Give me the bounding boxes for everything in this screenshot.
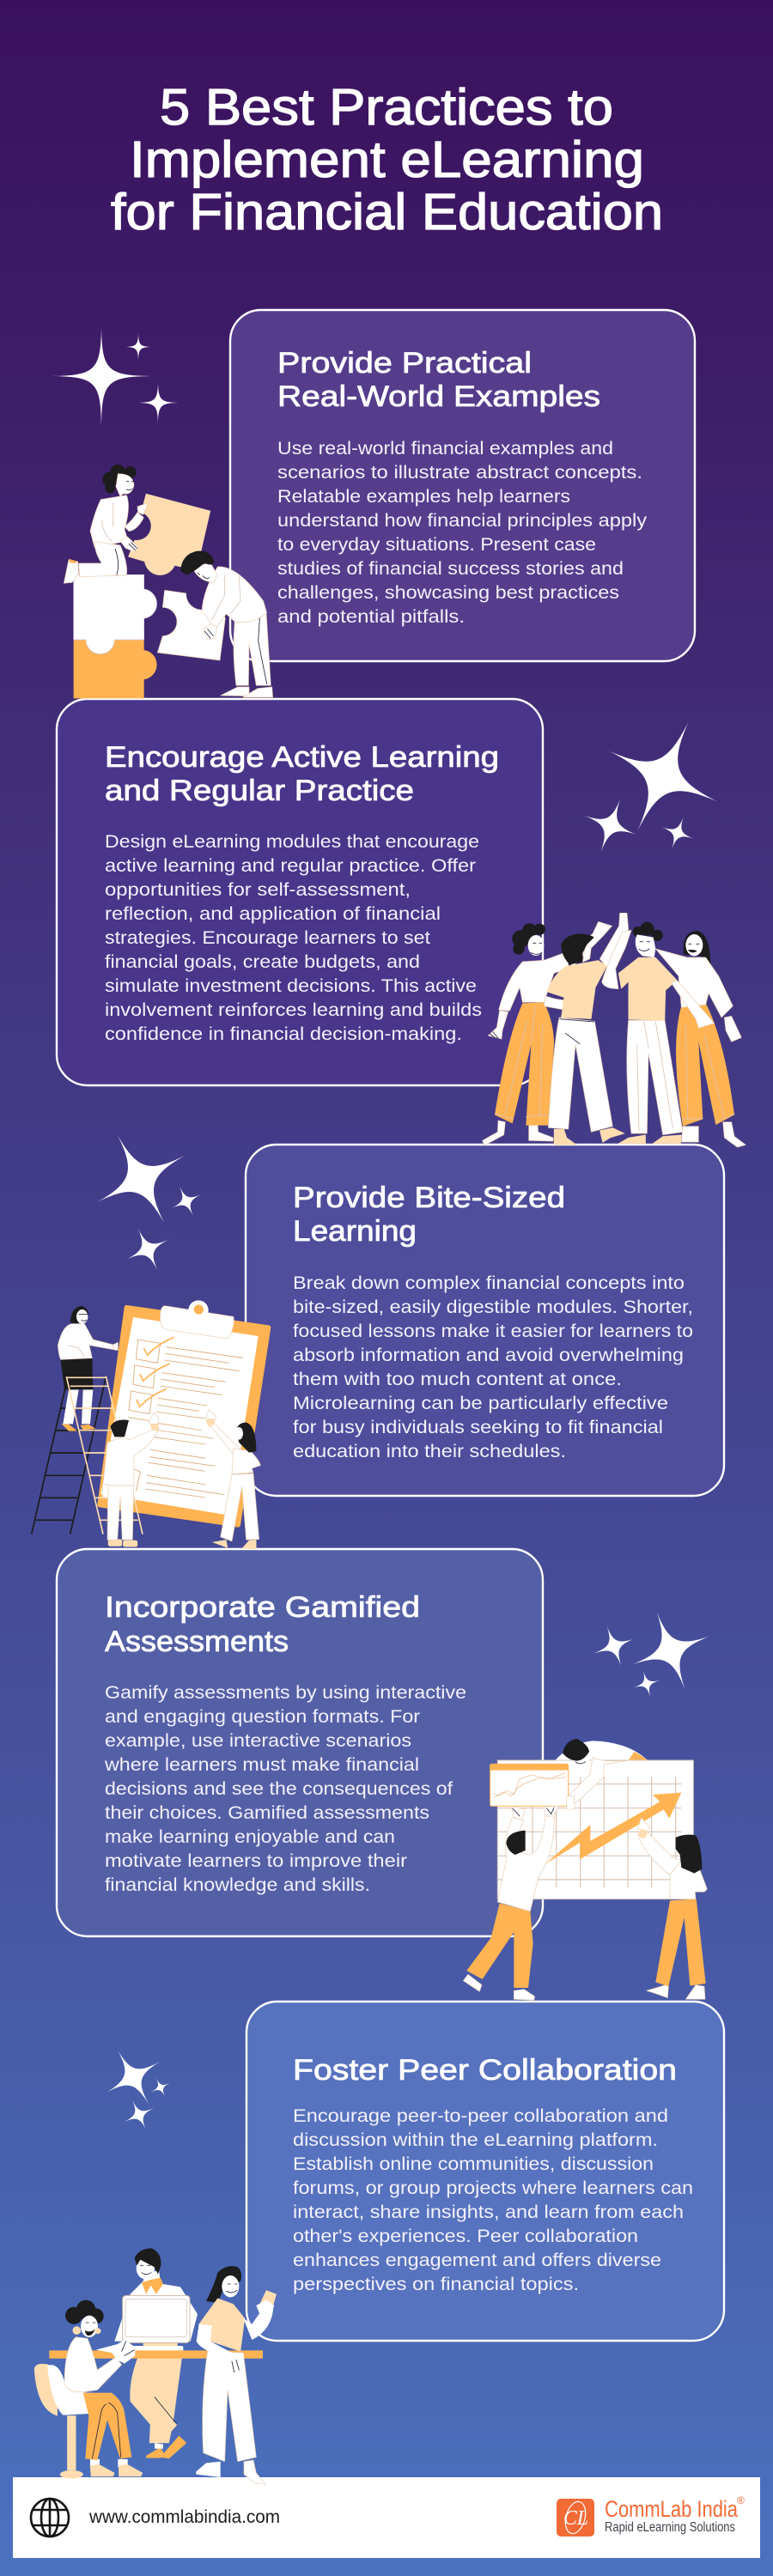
panel: provide practical real-world examples xyxy=(230,310,695,661)
panel: encourage active learning xyxy=(57,699,543,1085)
text block: practical examples: Use real-world financial examples and xyxy=(277,439,613,459)
text block: gamified: Gamify assessments by using interactive xyxy=(105,1683,466,1703)
ladder: back xyxy=(32,1376,106,1534)
heading: bite-sized: Learning xyxy=(293,1215,417,1248)
text block: bite-sized: them with too much content at once. xyxy=(293,1370,622,1389)
text block: peer collaboration: other's experiences. Peer collaboration xyxy=(293,2227,638,2246)
illustration: high-five team xyxy=(483,913,746,1147)
text block: active learning: active learning and regular practice. Offer xyxy=(105,856,476,876)
heading: gamified: Assessments xyxy=(105,1625,289,1658)
heading: gamified: Incorporate Gamified xyxy=(105,1591,420,1624)
text block: gamified: where learners must make financial xyxy=(104,1755,419,1775)
title: 5 Best Practices to xyxy=(160,79,613,136)
heading: practical examples xyxy=(277,347,600,413)
text block: practical examples: studies of financial success stories and xyxy=(277,559,624,579)
heading: active learning xyxy=(105,741,499,807)
text block: active learning: Design eLearning modules that encourage xyxy=(105,832,479,852)
floating line chart window xyxy=(490,1764,569,1806)
person: bending xyxy=(180,551,273,697)
text block: active learning: financial goals, create budgets, and xyxy=(105,952,420,972)
text block: active learning xyxy=(105,832,482,1044)
text block: practical examples xyxy=(277,439,648,627)
person: back view xyxy=(544,913,629,1145)
heading: gamified xyxy=(105,1591,420,1658)
heading: active learning: and Regular Practice xyxy=(105,775,414,807)
panel: gamified assessments xyxy=(57,1549,543,1936)
text block: gamified xyxy=(104,1683,466,1895)
text block: gamified: make learning enjoyable and can xyxy=(105,1827,395,1847)
text block: practical examples: to everyday situations. Present case xyxy=(277,535,596,555)
icon: sparkles 3 xyxy=(74,1112,208,1280)
text block: practical examples: scenarios to illustrate abstract concepts. xyxy=(277,463,642,483)
icon: globe xyxy=(31,2499,69,2537)
heading: active learning: Encourage Active Learning xyxy=(105,741,499,774)
title: Implement eLearning xyxy=(130,131,644,188)
website url: www.commlabindia.com xyxy=(88,2507,280,2527)
text block: peer collaboration xyxy=(293,2106,693,2294)
illustration: desk team xyxy=(34,2248,277,2484)
person: standing with phone xyxy=(196,2266,277,2484)
panel: bite-sized learning xyxy=(246,1145,724,1496)
text block: bite-sized: Break down complex financial concepts into xyxy=(293,1273,685,1293)
person: right in orange trousers xyxy=(633,922,746,1147)
text block: active learning: strategies. Encourage learners to set xyxy=(105,928,430,948)
text block: active learning: confidence in financial decision-making. xyxy=(105,1024,462,1044)
monitor xyxy=(123,2295,190,2351)
clipboard xyxy=(100,1300,269,1525)
person: lower left xyxy=(102,1413,159,1546)
text block: bite-sized: Microlearning can be particularly effective xyxy=(293,1394,668,1413)
heading: practical examples: Provide Practical xyxy=(277,347,532,380)
text block: practical examples: challenges, showcasing best practices xyxy=(277,583,619,603)
heading: practical examples: Real-World Examples xyxy=(277,380,600,413)
logo: commlab india: CL xyxy=(563,2507,588,2530)
text block: active learning: reflection, and application of financial xyxy=(105,904,441,924)
person: standing behind monitor xyxy=(114,2248,198,2458)
heading: peer collaboration: Foster Peer Collaboration xyxy=(293,2054,677,2087)
text block: peer collaboration: enhances engagement and offers diverse xyxy=(293,2251,661,2270)
panel: foster peer collaboration xyxy=(247,2002,724,2341)
text block: practical examples: Relatable examples help learners xyxy=(277,487,570,507)
logo: commlab india: Rapid eLearning Solutions xyxy=(605,2520,735,2535)
heading: bite-sized xyxy=(293,1182,565,1248)
text block: active learning: simulate investment decisions. This active xyxy=(105,976,477,996)
text block: practical examples: and potential pitfalls. xyxy=(277,607,465,627)
person: left xyxy=(463,1806,559,2000)
icon: rising arrow xyxy=(545,1793,681,1864)
person: right in white trousers xyxy=(602,930,683,1144)
icon: sparkles 1 xyxy=(52,326,180,426)
ladder: front xyxy=(66,1376,143,1534)
text block: gamified: motivate learners to improve their xyxy=(105,1851,407,1871)
text block: bite-sized xyxy=(293,1273,693,1461)
logo: commlab india: CommLab India xyxy=(605,2496,739,2522)
title xyxy=(111,79,663,240)
person: lower right xyxy=(205,1410,260,1549)
person: on ladder xyxy=(58,1306,118,1431)
desk xyxy=(49,2350,263,2359)
person: right xyxy=(637,1818,707,1999)
text block: peer collaboration: discussion within the eLearning platform. xyxy=(293,2130,658,2150)
text block: peer collaboration: Encourage peer-to-peer collaboration and xyxy=(293,2106,668,2126)
text block: bite-sized: absorb information and avoid overwhelming xyxy=(293,1346,684,1365)
text block: peer collaboration: perspectives on financial topics. xyxy=(293,2275,579,2294)
icon: sparkles 2 xyxy=(575,696,743,861)
person: seated xyxy=(34,2300,143,2478)
logo: commlab india xyxy=(557,2494,745,2537)
text block: peer collaboration: interact, share insights, and learn from each xyxy=(293,2202,684,2222)
person: left in orange trousers xyxy=(483,921,612,1145)
text block: gamified: and engaging question formats. For xyxy=(105,1707,420,1727)
illustration: checklist clipboard team xyxy=(32,1300,269,1549)
footer bar xyxy=(13,2477,760,2558)
semicircle behind board xyxy=(552,1741,647,1763)
illustration: puzzle team xyxy=(64,465,273,698)
text block: gamified: their choices. Gamified assessments xyxy=(105,1803,429,1823)
text block: bite-sized: bite-sized, easily digestible modules. Shorter, xyxy=(293,1297,693,1317)
heading: bite-sized: Provide Bite-Sized xyxy=(293,1182,565,1214)
person: top xyxy=(563,1739,633,1809)
text block: active learning: opportunities for self-assessment, xyxy=(105,880,411,900)
text block: gamified: example, use interactive scenarios xyxy=(105,1731,411,1751)
text block: bite-sized: focused lessons make it easier for learners to xyxy=(293,1321,693,1341)
text block: bite-sized: for busy individuals seeking to fit financial xyxy=(293,1418,663,1437)
person: kneeling xyxy=(64,465,148,583)
text block: gamified: financial knowledge and skills. xyxy=(105,1875,370,1895)
title: for Financial Education xyxy=(111,184,663,240)
icon: sparkles 5 xyxy=(91,2035,175,2136)
text block: bite-sized: education into their schedules. xyxy=(293,1442,566,1461)
text block: gamified: decisions and see the consequences of xyxy=(105,1779,453,1799)
illustration: growth chart team xyxy=(463,1739,707,2000)
text block: practical examples: understand how financial principles apply xyxy=(277,511,648,531)
text block: peer collaboration: Establish online communities, discussion xyxy=(293,2154,654,2174)
logo: commlab india: ® xyxy=(737,2494,745,2506)
text block: active learning: involvement reinforces learning and builds xyxy=(105,1000,482,1020)
chart board xyxy=(497,1760,693,1899)
icon: sparkles 4 xyxy=(587,1597,724,1704)
text block: peer collaboration: forums, or group projects where learners can xyxy=(293,2178,693,2198)
